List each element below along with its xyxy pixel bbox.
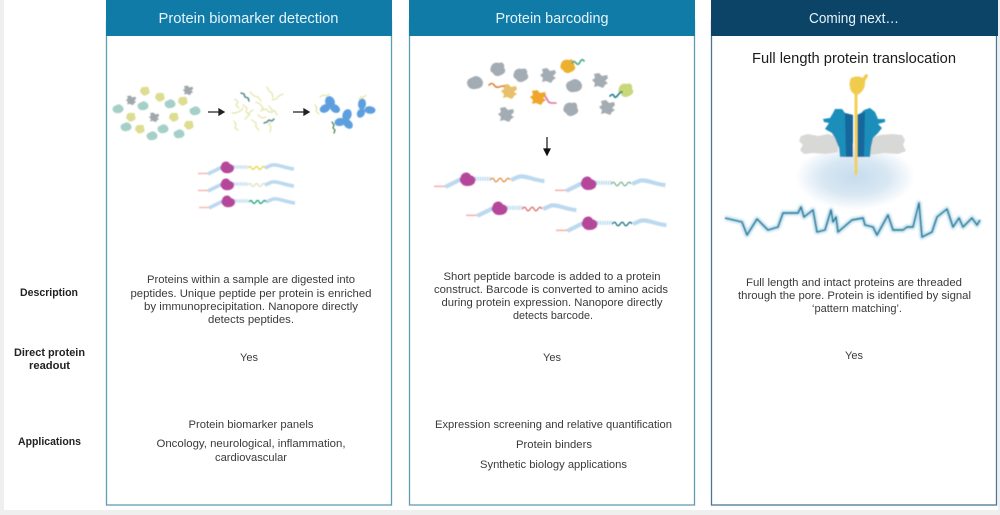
description text: Short peptide barcode is added to a protein (444, 271, 660, 283)
panel 1 frame (106, 20, 392, 505)
description text: peptides. Unique peptide per protein is enriched (130, 288, 372, 300)
direct readout value: Yes (845, 350, 863, 362)
signal trace (725, 203, 980, 237)
description text: Proteins within a sample are digested into (147, 274, 355, 286)
applications text (156, 419, 346, 464)
arrow: enrich (293, 109, 309, 115)
panel 1 header (106, 0, 392, 36)
description text (738, 277, 971, 315)
label: applications: Applications (18, 436, 81, 448)
illustration: peptides (232, 87, 283, 132)
panel: protein biomarker detection (106, 0, 392, 505)
panel 1 header: Protein biomarker detection (158, 11, 338, 27)
illustration: antibodies (315, 94, 376, 133)
description text: construct. Barcode is converted to amino acids (434, 284, 669, 296)
row labels (14, 287, 85, 448)
panel: coming next (711, 0, 998, 505)
panel 2 header (409, 0, 695, 36)
applications text: cardiovascular (215, 452, 287, 464)
illustration: nanopore constructs with barcodes (434, 173, 666, 231)
description text: ‘pattern matching’. (812, 303, 902, 315)
description text: detects barcode. (513, 310, 593, 322)
label: direct protein readout: readout (29, 360, 70, 372)
direct readout value: Yes (543, 352, 561, 364)
protein thread (850, 74, 868, 175)
panel 2 header: Protein barcoding (496, 11, 608, 27)
illustration: nanopore constructs with peptides (198, 162, 295, 208)
applications text: Expression screening and relative quantification (435, 419, 672, 431)
panel 3 header: Coming next… (809, 11, 899, 27)
illustration: protein translocating through nanopore (795, 74, 915, 210)
applications text: Protein binders (516, 439, 592, 451)
panel 3 header (711, 0, 998, 36)
description text: during protein expression. Nanopore directly (442, 297, 663, 309)
panel 3 frame (712, 20, 996, 505)
arrow: down (544, 137, 550, 155)
applications text: Protein biomarker panels (188, 419, 314, 431)
applications text: Oncology, neurological, inflammation, (156, 438, 346, 450)
illustration: barcoded protein mixture (467, 59, 633, 122)
label: direct protein readout (14, 347, 85, 372)
pore (823, 108, 885, 157)
label: description: Description (20, 287, 78, 299)
label: direct protein readout: Direct protein (14, 347, 85, 359)
description text: through the pore. Protein is identified by signal (738, 290, 971, 302)
ion glow (795, 144, 915, 210)
panel: protein barcoding (409, 0, 695, 505)
arrow: digest (208, 109, 224, 115)
applications text (435, 419, 672, 471)
description text (130, 274, 372, 326)
membrane (799, 134, 906, 155)
panel 3 title: Full length protein translocation (752, 51, 956, 67)
description text (434, 271, 669, 322)
illustration: protein mixture (112, 86, 200, 140)
description text: detects peptides. (208, 314, 294, 326)
panel 2 frame (410, 20, 694, 505)
description text: Full length and intact proteins are threaded (746, 277, 962, 289)
applications text: Synthetic biology applications (480, 459, 628, 471)
direct readout value: Yes (240, 352, 258, 364)
description text: by immunoprecipitation. Nanopore directly (144, 301, 359, 313)
